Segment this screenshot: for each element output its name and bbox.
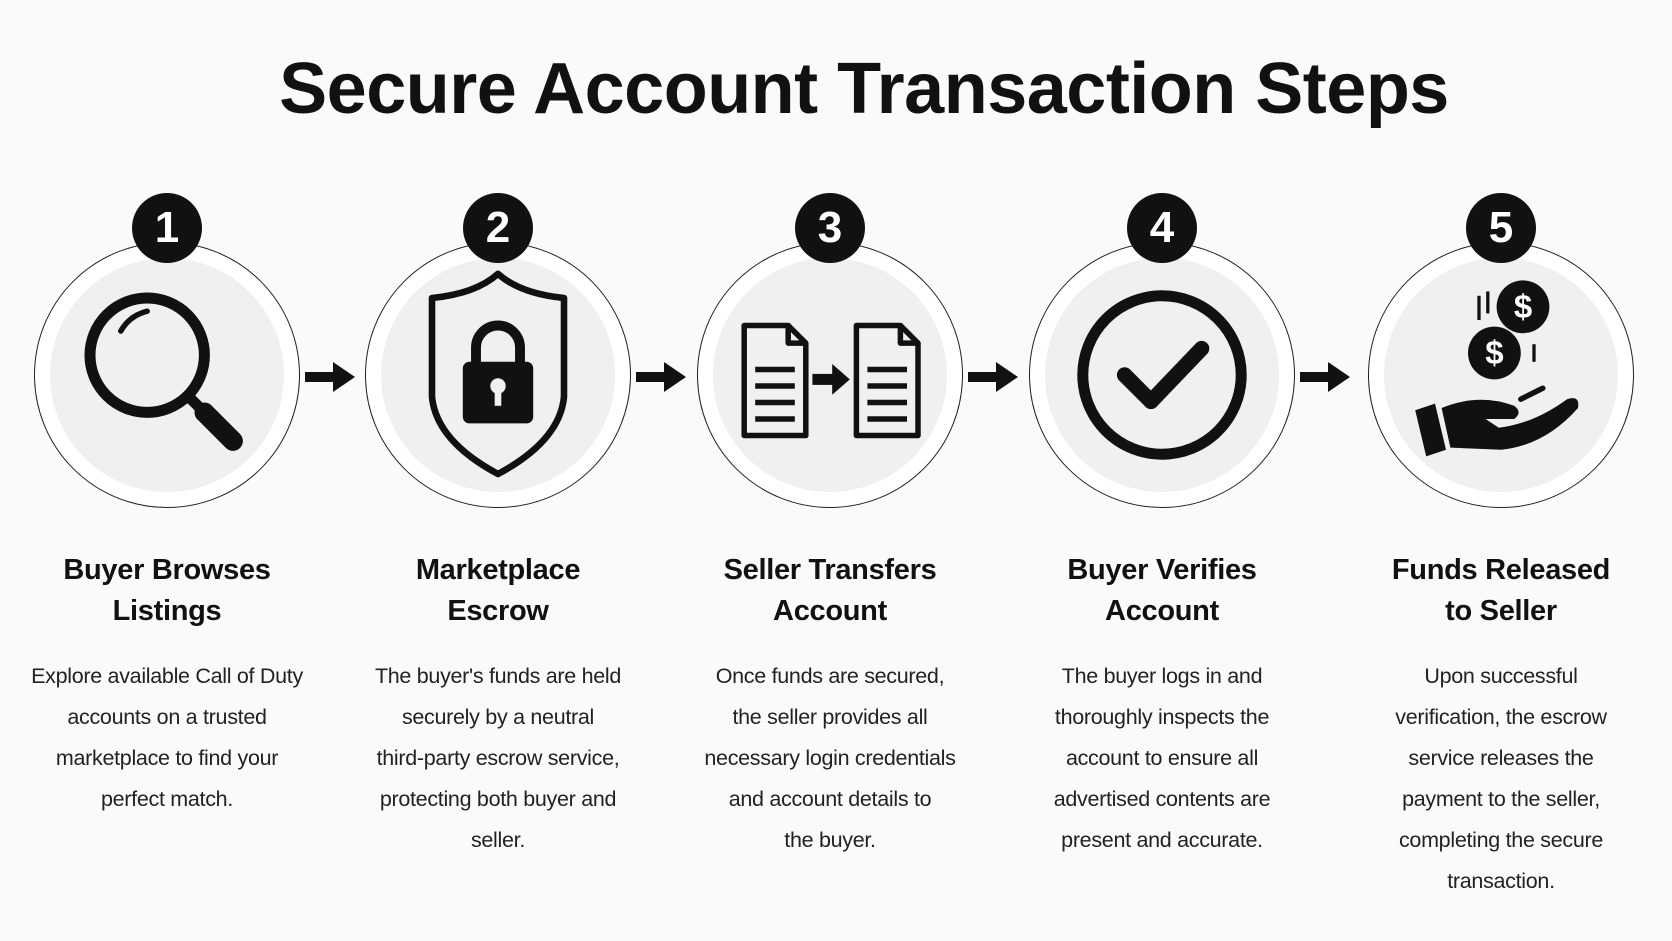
badge 1 (132, 193, 202, 263)
arrow 1 (305, 362, 355, 392)
text 3 (704, 664, 956, 852)
text 5: verification, the escrow (1395, 705, 1607, 729)
text 2 (375, 664, 621, 852)
step 5 (1368, 193, 1634, 893)
arrow 4 (1300, 362, 1350, 392)
text 2: third-party escrow service, (377, 746, 619, 770)
heading 2: Escrow (447, 595, 549, 627)
icon: shield lock (428, 270, 568, 478)
badge 2 (463, 193, 533, 263)
text 3: Once funds are secured, (716, 664, 944, 688)
step 1 (31, 193, 304, 811)
badge 2: 2 (486, 203, 510, 252)
text 3: the buyer. (784, 828, 876, 852)
text 1: marketplace to find your (56, 746, 278, 770)
heading 2: Marketplace (416, 554, 580, 586)
text 4: account to ensure all (1066, 746, 1258, 770)
text 5: service releases the (1408, 746, 1594, 770)
badge 5 (1466, 193, 1536, 263)
text 5: transaction. (1447, 869, 1555, 893)
heading 5 (1392, 554, 1610, 627)
heading 2 (416, 554, 580, 627)
text 1: accounts on a trusted (67, 705, 267, 729)
text 4: advertised contents are (1054, 787, 1270, 811)
heading 5: to Seller (1445, 595, 1557, 627)
heading 3: Seller Transfers (724, 554, 936, 586)
text 4: present and accurate. (1061, 828, 1263, 852)
text 4: thoroughly inspects the (1055, 705, 1269, 729)
text 5 (1395, 664, 1608, 893)
text 1: perfect match. (101, 787, 233, 811)
step 4 (1029, 193, 1295, 852)
heading 4: Buyer Verifies (1067, 554, 1257, 586)
text 3: and account details to (729, 787, 931, 811)
icon: check circle (1077, 290, 1247, 460)
heading 1: Buyer Browses (63, 554, 271, 586)
arrow 2 (636, 362, 686, 392)
badge 4 (1127, 193, 1197, 263)
heading 5: Funds Released (1392, 554, 1610, 586)
text 4: The buyer logs in and (1062, 664, 1262, 688)
badge 1: 1 (155, 203, 179, 252)
badge 4: 4 (1150, 203, 1174, 252)
icon: documents transfer (741, 322, 921, 438)
text 5: Upon successful (1424, 664, 1578, 688)
text 5: payment to the seller, (1402, 787, 1600, 811)
text 2: securely by a neutral (402, 705, 594, 729)
text 2: protecting both buyer and (380, 787, 616, 811)
arrow 3 (968, 362, 1018, 392)
icon: hand with coins: $ (1485, 334, 1504, 371)
heading 1: Listings (113, 595, 221, 627)
heading 4 (1067, 554, 1257, 627)
icon: hand with coins: $ (1514, 288, 1532, 325)
step 3 (697, 193, 963, 852)
text 4 (1054, 664, 1270, 852)
heading 3: Account (773, 595, 887, 627)
icon: magnifier (84, 292, 243, 451)
text 1 (31, 664, 304, 811)
badge 3 (795, 193, 865, 263)
text 1: Explore available Call of Duty (31, 664, 303, 688)
text 5: completing the secure (1399, 828, 1603, 852)
title: Secure Account Transaction Steps (279, 49, 1449, 129)
text 2: seller. (471, 828, 525, 852)
text 3: necessary login credentials (704, 746, 956, 770)
badge 3: 3 (818, 203, 842, 252)
text 3: the seller provides all (732, 705, 928, 729)
heading 1 (63, 554, 271, 627)
heading 3 (724, 554, 936, 627)
heading 4: Account (1105, 595, 1219, 627)
step 2 (365, 193, 631, 852)
badge 5: 5 (1489, 203, 1513, 252)
icon: hand with coins (1415, 280, 1578, 456)
text 2: The buyer's funds are held (375, 664, 621, 688)
